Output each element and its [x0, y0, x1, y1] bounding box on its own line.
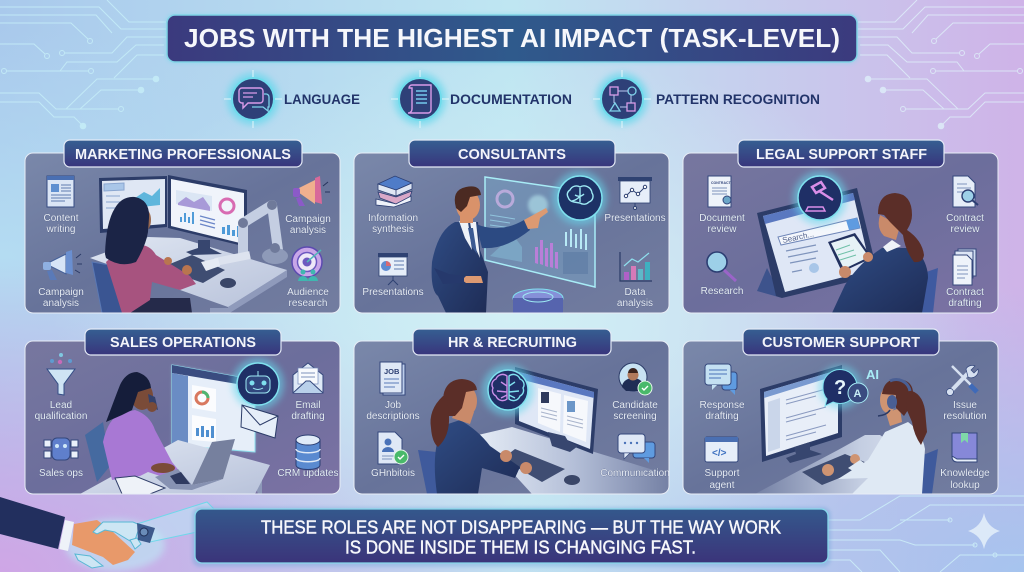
label: audience research: research [289, 298, 327, 309]
label: campaign analysis left: Campaign [38, 287, 84, 298]
label: audience research: Audience [287, 287, 329, 298]
icon: job description [380, 362, 405, 395]
circuit lines: top right [858, 0, 1024, 129]
icon: document stack [953, 249, 976, 285]
heading pill: legal support staff: LEGAL SUPPORT STAFF [756, 146, 927, 163]
title [165, 13, 859, 64]
icon: code window: </> [712, 448, 727, 459]
panel: consultants [354, 140, 669, 318]
heading pill: customer support [743, 329, 939, 355]
icon: article [47, 176, 74, 207]
label: campaign analysis left: analysis [43, 298, 79, 309]
panel: sales operations [25, 329, 340, 494]
panel: hr & recruiting [354, 329, 670, 494]
scene: sales worker with laptop [80, 358, 284, 494]
label: campaign analysis right: Campaign [285, 214, 331, 225]
label: email drafting: Email [295, 400, 321, 411]
label: lead qualification: Lead [50, 400, 72, 411]
icon: job description: JOB [384, 367, 400, 376]
label: document review: review [708, 224, 737, 235]
theme: documentation [391, 70, 572, 128]
scene: support agent with headset: AI [866, 367, 879, 382]
label: data analysis: Data [624, 287, 646, 298]
label: information synthesis: synthesis [372, 224, 414, 235]
label: campaign analysis right: analysis [290, 225, 326, 236]
takeaway banner: THESE ROLES ARE NOT DISAPPEARING — BUT THE WAY WORK [261, 518, 781, 538]
label: pattern recognition: PATTERN RECOGNITION [656, 92, 820, 107]
heading pill: hr & recruiting: HR & RECRUITING [448, 334, 577, 351]
heading pill: customer support: CUSTOMER SUPPORT [762, 334, 920, 351]
label: crm updates: CRM updates [277, 468, 339, 479]
label: document review: Document [699, 213, 745, 224]
icon: presentation line chart [618, 177, 652, 210]
scene: marketer with robot arm [90, 175, 288, 320]
label: response drafting: drafting [705, 411, 739, 422]
icon: human and robot handshake [0, 497, 215, 571]
label: knowledge lookup: lookup [950, 480, 980, 491]
icon: bar chart [620, 252, 652, 281]
label: job descriptions: Job [385, 400, 401, 411]
label: support agent: agent [709, 480, 735, 491]
label: research: Research [701, 286, 743, 297]
takeaway banner: IS DONE INSIDE THEM IS CHANGING FAST. [345, 538, 696, 558]
icon: funnel [47, 353, 75, 395]
theme: language [224, 70, 360, 128]
label: contract drafting: Contract [946, 287, 984, 298]
icon: contract magnifier [953, 176, 978, 207]
icon: contract [708, 176, 731, 207]
label: knowledge lookup: Knowledge [940, 468, 990, 479]
scene: support agent with headset: ? [834, 377, 846, 399]
scene: support agent with headset [755, 365, 938, 494]
label: lead qualification: qualification [35, 411, 87, 422]
theme: pattern recognition [593, 70, 820, 128]
label: issue resolution: resolution [943, 411, 987, 422]
icon: megaphone pink [293, 176, 330, 206]
label: response drafting: Response [699, 400, 745, 411]
icon: presentation pie [378, 253, 408, 285]
icon: profile document [378, 432, 408, 464]
label: presentations right: Presentations [604, 213, 666, 224]
icon: sparkle [968, 513, 1000, 549]
icon: megaphone blue [43, 250, 82, 280]
scene: recruiter reviewing candidates [418, 364, 670, 494]
heading pill: consultants [409, 140, 615, 167]
icon: target audience [292, 247, 322, 281]
label: language: LANGUAGE [284, 92, 360, 107]
icon: connected shapes [593, 70, 651, 128]
icon: contract: CONTRACT [711, 181, 731, 185]
icon: code window [705, 437, 738, 462]
icon: stack of books [376, 176, 412, 207]
icon: knowledge book [952, 433, 977, 462]
label: sales ops: Sales ops [39, 468, 83, 479]
label: presentations left: Presentations [362, 287, 424, 298]
label: ghnbitois: GHnbitois [371, 468, 415, 479]
panel: customer support [683, 329, 998, 494]
icon: scroll document [391, 70, 449, 128]
icon: sales ops robot [44, 438, 78, 460]
label: candidate screening: Candidate [612, 400, 658, 411]
label: support agent: Support [704, 468, 740, 479]
heading pill: marketing professionals [64, 140, 302, 167]
panel: legal support staff [683, 140, 998, 313]
icon: response bubbles [705, 364, 737, 395]
label: content writing: Content [43, 213, 79, 224]
icon: wrench and screwdriver [946, 365, 978, 396]
icon: chat bubbles [618, 434, 655, 463]
circuit lines: bottom right [828, 496, 1024, 572]
label: communication: Communication [600, 468, 670, 479]
heading pill: sales operations [85, 329, 281, 355]
icon: envelope letter [293, 363, 323, 393]
label: candidate screening: screening [613, 411, 657, 422]
label: content writing: writing [46, 224, 75, 235]
label: contract review: review [951, 224, 980, 235]
heading pill: legal support staff [738, 140, 944, 167]
icon: magnifier [707, 252, 736, 281]
heading pill: sales operations: SALES OPERATIONS [110, 334, 256, 351]
takeaway banner [192, 507, 831, 567]
label: job descriptions: descriptions [366, 411, 420, 422]
panel: marketing professionals [25, 140, 340, 320]
title: JOBS WITH THE HIGHEST AI IMPACT (TASK-LEVEL) [184, 25, 840, 53]
heading pill: hr & recruiting [413, 329, 611, 355]
heading pill: marketing professionals: MARKETING PROFESSIONALS [75, 146, 291, 163]
label: issue resolution: Issue [953, 400, 977, 411]
label: data analysis: analysis [617, 298, 653, 309]
scene: support agent with headset: A [854, 388, 862, 400]
scene: consultant at holographic display [432, 171, 607, 318]
label: contract drafting: drafting [948, 298, 982, 309]
icon: speech bubbles [224, 70, 282, 128]
label: information synthesis: Information [368, 213, 418, 224]
heading pill: consultants: CONSULTANTS [458, 146, 566, 163]
icon: candidate check [619, 363, 652, 395]
icon: database [296, 435, 320, 470]
scene: legal worker with tablet [757, 171, 938, 313]
label: documentation: DOCUMENTATION [450, 92, 572, 107]
scene: legal worker with tablet: Search... [782, 229, 815, 245]
circuit lines: top left [0, 0, 166, 129]
label: contract review: Contract [946, 213, 984, 224]
label: email drafting: drafting [291, 411, 325, 422]
